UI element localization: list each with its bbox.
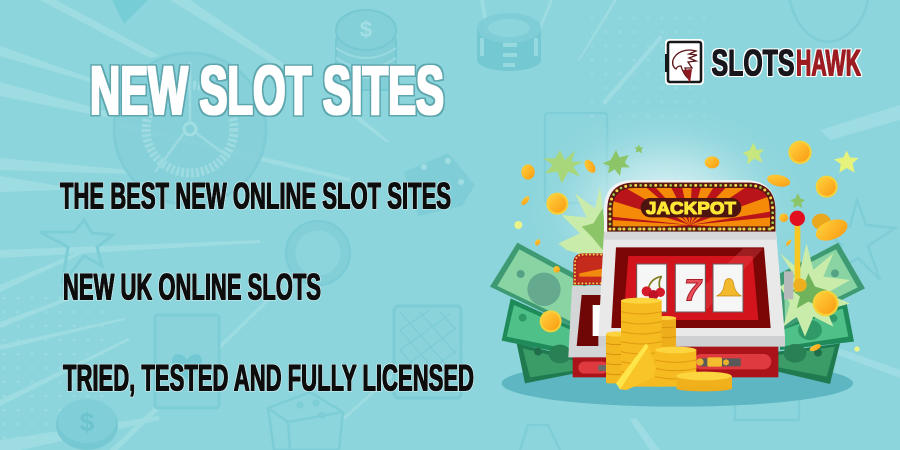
logo hawk badge: [665, 39, 704, 85]
banknotes right: [778, 243, 865, 384]
background icon: heart playing card: [155, 315, 219, 408]
reel window: [611, 247, 771, 328]
floating coins: [514, 141, 860, 353]
background icon: coin stack: [336, 10, 396, 90]
jackpot lettering: JACKPOT: [646, 198, 736, 218]
reel: seven: [675, 264, 705, 312]
background icon: patterned playing card: [394, 306, 461, 398]
tagline: best new sites: THE BEST NEW ONLINE SLOT SITES: [60, 176, 451, 216]
coin stacks: [606, 298, 732, 391]
title: NEW SLOT SITES: [90, 52, 444, 129]
banknotes left: [490, 243, 587, 383]
tagline: tried and tested: TRIED, TESTED AND FULLY LICENSED: [63, 358, 474, 398]
background icon: dollar coin: [56, 399, 118, 450]
ground shadow: [502, 360, 853, 407]
background icon: spade diamond top: [112, 0, 148, 24]
background icon: dice bottom: [268, 392, 343, 450]
slot machine illustration: [490, 103, 865, 407]
marquee with sunburst: [607, 183, 775, 231]
machine lever: [784, 211, 807, 299]
radial glow: [523, 103, 810, 317]
green bursts: [543, 143, 859, 337]
background icon: roulette wheel: [114, 53, 266, 205]
reel: bell: [713, 264, 743, 312]
background icon: dice top: [404, 153, 475, 216]
background icon: dollar coin: $: [80, 407, 95, 437]
main slot machine cabinet: [598, 180, 785, 377]
background icon: poker chip stack: [477, 13, 541, 71]
back slot machine: [568, 253, 609, 377]
tagline: new UK slots: NEW UK ONLINE SLOTS: [63, 266, 321, 308]
logo: Slotshawk: [665, 39, 861, 85]
background icon: coin stack: $: [360, 17, 372, 42]
background icon: poker chip: [286, 221, 350, 285]
background icon: star: [40, 220, 113, 284]
reel: cherries: [637, 264, 667, 312]
reel: seven: 7: [684, 274, 703, 308]
background icon: top right coin bag and card: [520, 0, 895, 450]
logo wordmark: SLOTS: [712, 42, 794, 84]
